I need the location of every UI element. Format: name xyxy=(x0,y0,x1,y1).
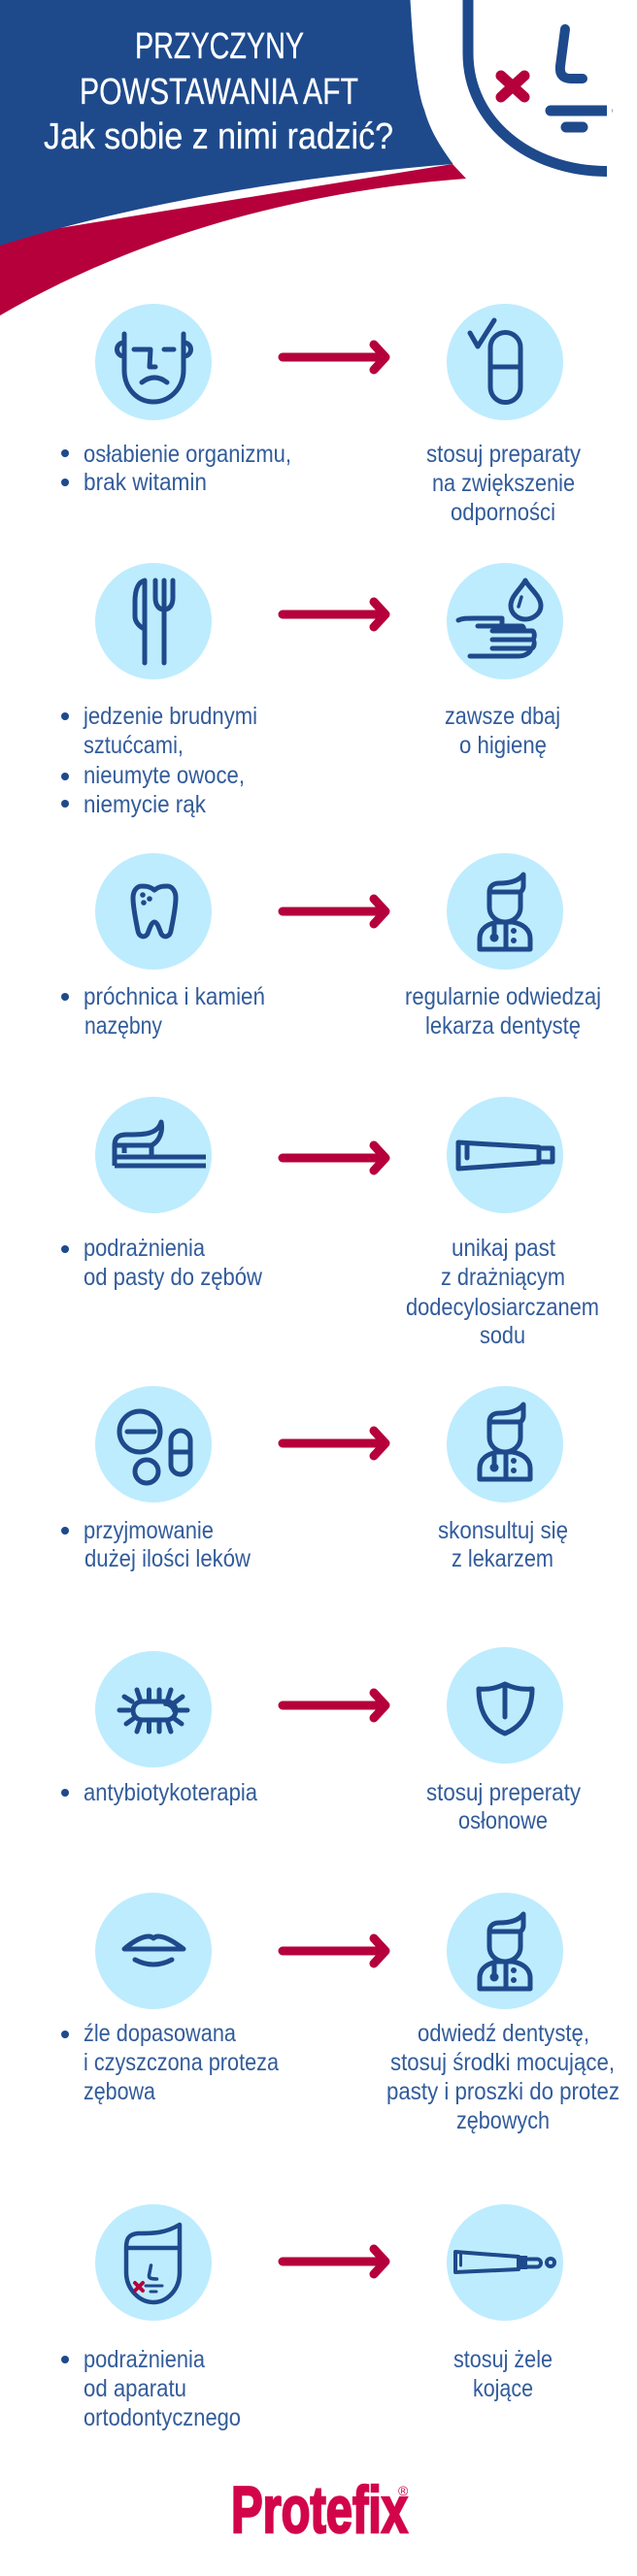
cause text: nieumyte owoce, xyxy=(84,762,245,789)
arrow xyxy=(283,602,386,627)
row 5: many medicines xyxy=(61,1386,568,1572)
arrow xyxy=(283,1145,386,1171)
logo: Protefix: ® xyxy=(398,2483,409,2498)
remedy text: stosuj środki mocujące, xyxy=(390,2049,615,2076)
icon: knife and fork xyxy=(95,563,212,679)
row 6: antibiotic therapy xyxy=(61,1647,581,1834)
cause text: antybiotykoterapia xyxy=(84,1779,257,1806)
icon: lips xyxy=(95,1893,212,2009)
cause text xyxy=(61,1517,251,1572)
remedy text: stosuj preparaty xyxy=(426,441,581,468)
remedy text: o higienę xyxy=(459,732,547,759)
arrow xyxy=(283,1938,386,1964)
remedy text: skonsultuj się xyxy=(438,1517,568,1544)
cause text: źle dopasowana xyxy=(84,2020,236,2047)
icon: toothpaste tube xyxy=(447,1097,563,1213)
cause text xyxy=(61,2346,241,2431)
title: PRZYCZYNY xyxy=(135,26,304,67)
remedy text: regularnie odwiedzaj xyxy=(405,983,601,1010)
header banner xyxy=(0,0,466,315)
cause text: i czyszczona proteza xyxy=(84,2049,279,2076)
cause text xyxy=(61,983,265,1040)
cause text: podrażnienia xyxy=(84,1235,205,1262)
remedy text xyxy=(405,983,601,1040)
cause text: osłabienie organizmu, xyxy=(84,441,291,468)
icon: tired face xyxy=(95,304,212,420)
arrow xyxy=(283,1431,386,1456)
row 4: toothpaste irritation xyxy=(61,1097,599,1349)
icon: hand and water drop xyxy=(447,563,563,679)
red swoosh xyxy=(0,164,466,315)
icon: doctor xyxy=(447,1386,563,1503)
remedy text: zębowych xyxy=(456,2107,550,2134)
remedy text: stosuj żele xyxy=(453,2346,553,2373)
remedy text: zawsze dbaj xyxy=(445,703,560,730)
arrow xyxy=(283,345,386,370)
title xyxy=(44,26,393,157)
remedy text xyxy=(386,2020,620,2134)
icon: bacterium xyxy=(95,1651,212,1767)
cause text: nazębny xyxy=(84,1012,162,1040)
row 7: ill-fitting denture xyxy=(61,1893,620,2134)
cause text: sztućcami, xyxy=(84,732,184,759)
logo: Protefix: Protefix xyxy=(231,2473,408,2547)
icon: large face with sore xyxy=(468,0,612,171)
arrow xyxy=(283,1693,386,1718)
remedy text: unikaj past xyxy=(452,1235,555,1262)
icon: decayed tooth xyxy=(95,853,212,970)
remedy text xyxy=(445,703,560,759)
remedy text: na zwiększenie xyxy=(432,470,575,497)
remedy text xyxy=(438,1517,568,1572)
icon: pills xyxy=(95,1386,212,1503)
cause text xyxy=(61,441,291,496)
remedy text: odwiedź dentystę, xyxy=(418,2020,589,2047)
icon: face with braces sore xyxy=(95,2204,212,2321)
remedy text xyxy=(426,441,581,526)
cause text: dużej ilości leków xyxy=(84,1545,251,1572)
cause text: podrażnienia xyxy=(84,2346,205,2373)
cause text: niemycie rąk xyxy=(84,791,206,818)
cause text: przyjmowanie xyxy=(84,1517,214,1544)
cause text xyxy=(61,1235,263,1291)
cause text xyxy=(61,703,257,818)
cause text: od aparatu xyxy=(84,2375,186,2402)
remedy text: stosuj preperaty xyxy=(426,1779,581,1806)
row 3: caries and tartar xyxy=(61,853,601,1040)
remedy text: z lekarzem xyxy=(452,1545,553,1572)
remedy text: odporności xyxy=(451,499,555,526)
icon: capsule with check xyxy=(447,304,563,420)
cause text: od pasty do zębów xyxy=(84,1264,263,1291)
remedy text: osłonowe xyxy=(458,1807,548,1834)
remedy text xyxy=(426,1779,581,1834)
remedy text xyxy=(406,1235,599,1349)
cause text: próchnica i kamień xyxy=(84,983,265,1010)
cause text: ortodontycznego xyxy=(84,2404,241,2431)
row 1: weakened organism xyxy=(61,304,581,526)
title: Jak sobie z nimi radzić? xyxy=(44,116,393,157)
cause text: zębowa xyxy=(84,2078,155,2105)
cause text: jedzenie brudnymi xyxy=(83,703,257,730)
arrow xyxy=(283,2249,386,2274)
arrow xyxy=(283,899,386,924)
icon: dentist xyxy=(447,853,563,970)
cause text: brak witamin xyxy=(84,469,207,496)
icon: dentist xyxy=(447,1893,563,2009)
remedy text xyxy=(453,2346,553,2402)
row 8: orthodontic appliance xyxy=(61,2204,563,2431)
remedy text: dodecylosiarczanem xyxy=(406,1294,599,1321)
icon: toothbrush with paste xyxy=(95,1097,212,1213)
remedy text: kojące xyxy=(473,2375,533,2402)
remedy text: lekarza dentystę xyxy=(425,1012,581,1040)
cause text xyxy=(61,2020,279,2105)
title: POWSTAWANIA AFT xyxy=(80,72,358,113)
blue banner shape xyxy=(0,0,453,246)
icon: shield xyxy=(447,1647,563,1764)
remedy text: sodu xyxy=(480,1322,525,1349)
row 2: dirty cutlery xyxy=(61,563,563,818)
icon: gel tube xyxy=(447,2204,563,2321)
remedy text: z drażniącym xyxy=(441,1264,565,1291)
